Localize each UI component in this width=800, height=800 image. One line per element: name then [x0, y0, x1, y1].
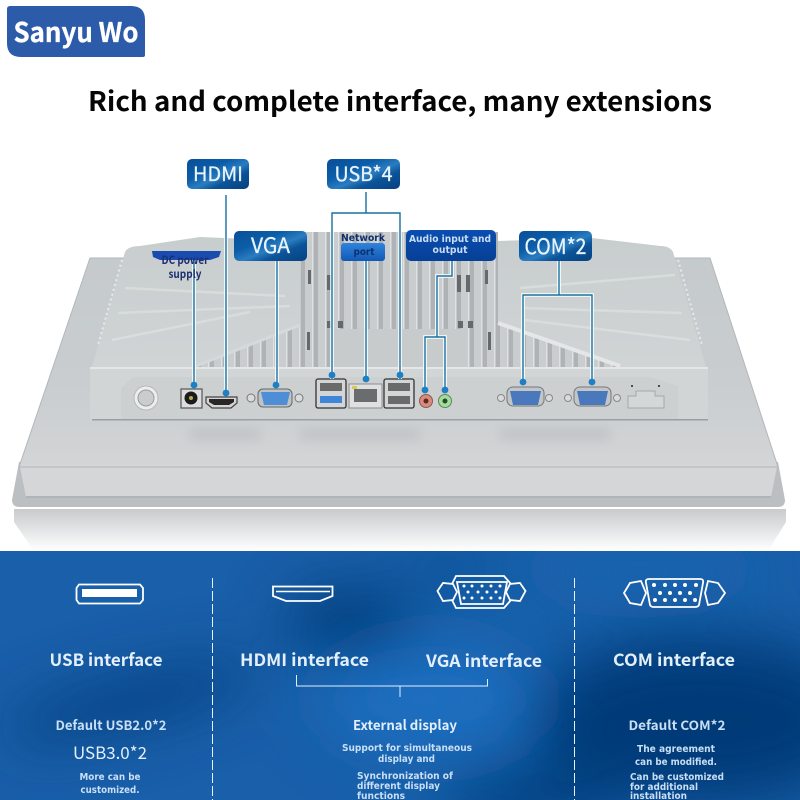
- connector dots: [191, 372, 595, 396]
- reflection on plate: [190, 427, 610, 441]
- icon: HDMI: [273, 586, 332, 601]
- text block: COM spec: The agreement: [637, 744, 715, 755]
- heading: COM interface: COM interface: [613, 646, 735, 671]
- text block: COM spec: for additional: [630, 782, 698, 793]
- text block: COM spec: Can be customized: [630, 772, 724, 783]
- cover highlights: [112, 275, 690, 340]
- port: audio jacks: [420, 394, 452, 408]
- reflection: [14, 509, 786, 551]
- label: VGA: VGA: [251, 230, 290, 260]
- port: HDMI: [206, 397, 237, 408]
- label: network port: port: [354, 247, 375, 258]
- text block: external display: display and: [378, 754, 435, 765]
- icon: USB: [76, 584, 143, 604]
- label: USB*4: USB*4: [334, 158, 392, 187]
- port: COM 2: [564, 387, 620, 406]
- text block: COM spec: can be modified.: [635, 757, 717, 768]
- label: HDMI: HDMI: [193, 158, 243, 187]
- heat sink vent notches: [307, 270, 491, 350]
- label: VGA: [234, 230, 307, 261]
- rear plate: [19, 258, 778, 467]
- back cover lobes: [92, 237, 300, 367]
- label: audio input and output: [406, 230, 496, 261]
- text block: USB spec: [56, 715, 166, 796]
- port: RJ45: [349, 384, 382, 408]
- label: DC power supply: [152, 251, 221, 282]
- port: blank RJ knockout: [628, 385, 664, 408]
- text block: COM spec: Default COM*2: [628, 715, 726, 734]
- port: DC jack: [181, 389, 202, 408]
- bracket: [296, 675, 488, 697]
- front bezel frame: [12, 462, 785, 507]
- text block: USB spec: customized.: [80, 785, 140, 796]
- text block: external display: Synchronization of: [357, 771, 454, 782]
- text block: COM spec: [628, 715, 726, 800]
- heading: HDMI interface: HDMI interface: [240, 646, 369, 671]
- logo badge: Sanyu Wo: [14, 11, 138, 50]
- text block: external display: External display: [353, 714, 457, 734]
- label: network port: [341, 233, 385, 261]
- label: audio input and output: output: [432, 245, 468, 256]
- port: USB stack right: [384, 379, 414, 408]
- label: COM*2: COM*2: [524, 231, 586, 261]
- dashed dividers: [212, 578, 574, 800]
- heading: USB interface: USB interface: [50, 646, 163, 671]
- label: network port: Network: [341, 233, 385, 244]
- connector lines: [194, 192, 592, 393]
- text block: USB spec: Default USB2.0*2: [56, 715, 166, 734]
- blue background: [0, 550, 800, 800]
- panel: interface details: [0, 550, 800, 800]
- text block: external display: [342, 714, 472, 800]
- text block: USB spec: USB3.0*2: [73, 739, 147, 764]
- connector shelf: [90, 367, 708, 420]
- text block: USB spec: More can be: [80, 772, 141, 783]
- label: audio input and output: Audio input and: [409, 234, 491, 245]
- port: VGA: [247, 389, 303, 407]
- product photo: rear of industrial panel PC: [12, 232, 786, 551]
- label: DC power supply: DC power: [162, 252, 209, 268]
- port: COM 1: [498, 387, 552, 406]
- icon: VGA: [438, 576, 526, 608]
- icon: COM: [624, 579, 725, 607]
- text block: external display: Support for simultaneous: [342, 743, 472, 754]
- text block: external display: different display: [357, 781, 440, 792]
- heading: VGA interface: VGA interface: [425, 647, 542, 672]
- heat sink fins: [300, 232, 498, 367]
- title: Rich and complete interface, many extensions: [88, 80, 712, 119]
- port: USB stack left: [316, 379, 346, 408]
- port: power button: [134, 386, 158, 410]
- label: DC power supply: supply: [168, 266, 202, 282]
